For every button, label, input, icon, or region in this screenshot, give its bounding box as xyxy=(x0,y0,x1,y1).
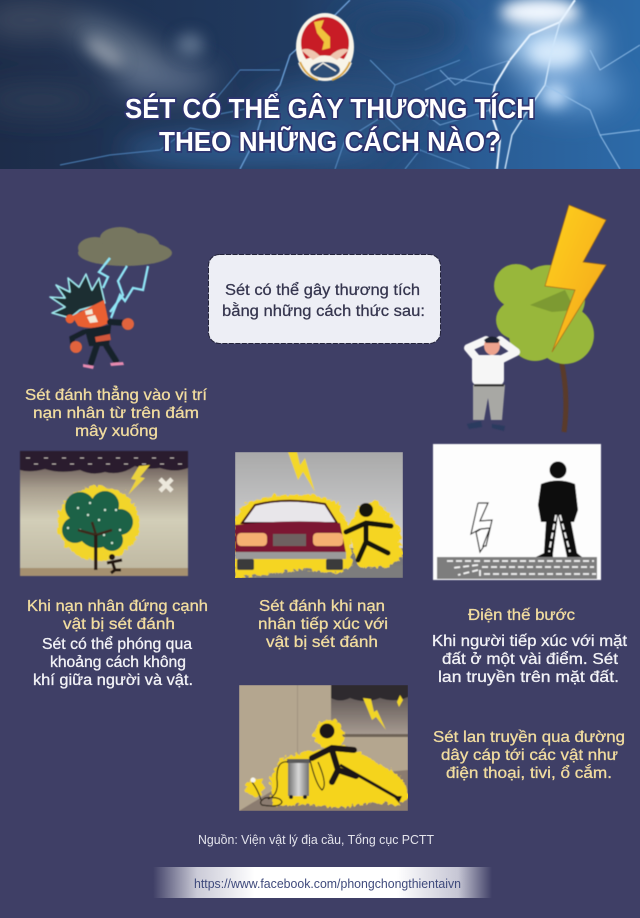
caption column: beside struck object: khoảng cách không xyxy=(50,654,186,671)
caption column: step voltage: lan truyền trên mặt đất. xyxy=(438,669,619,686)
caption: spread through cables: điện thoại, tivi, ổ cắm. xyxy=(446,765,612,782)
icon: x mark xyxy=(160,479,172,491)
callout box xyxy=(208,254,440,344)
icon: yellow glow around car and figure xyxy=(232,492,400,576)
title: SÉT CÓ THỂ GÂY THƯƠNG TÍCH xyxy=(125,93,535,124)
icon: running figure xyxy=(107,560,122,573)
icon: glowing tree xyxy=(55,484,137,558)
icon: small bolt xyxy=(128,465,150,495)
link bar: https://www.facebook.com/phongchongthientaivn xyxy=(194,876,461,891)
icon: cable and plug xyxy=(252,760,324,806)
icon: car xyxy=(242,501,337,523)
icon: bolt xyxy=(288,452,315,492)
source line: Nguồn: Viện vật lý địa cầu, Tổng cục PCTT xyxy=(198,832,434,847)
icon: tree crown xyxy=(494,264,594,364)
caption column: beside struck object: vật bị sét đánh xyxy=(63,616,175,633)
icon: electrified person xyxy=(320,724,334,738)
caption column: step voltage: đất ở một vài điểm. Sét xyxy=(442,651,619,668)
dark clouds xyxy=(20,451,188,474)
icon: standing silhouette xyxy=(536,462,582,557)
icon: storm cloud xyxy=(78,227,172,266)
icon: body xyxy=(72,322,126,363)
caption column: beside struck object: khí giữa người và vật. xyxy=(33,672,193,689)
caption column: step voltage xyxy=(432,607,628,686)
caption column: beside struck object xyxy=(27,598,208,689)
caption: spread through cables xyxy=(433,729,625,782)
logo emblem xyxy=(296,13,354,81)
caption column: contact with struck object: Sét đánh khi nạn xyxy=(259,598,385,615)
illustration: tree, lightning bolt and man xyxy=(467,205,606,432)
image panel: tree strike xyxy=(20,451,188,576)
icon: cyan lightning bolts xyxy=(99,258,148,318)
caption: spread through cables: Sét lan truyền qua đường xyxy=(433,729,625,746)
image panel: car strike xyxy=(232,452,403,578)
callout box: Sét có thể gây thương tích xyxy=(225,282,420,299)
caption: spread through cables: dây cáp tới các vật như xyxy=(441,747,618,764)
image panel: indoor cable strike xyxy=(239,685,408,811)
caption column: step voltage: Khi người tiếp xúc với mặt xyxy=(432,633,628,650)
caption: direct strike: nạn nhân từ trên đám xyxy=(33,405,199,422)
caption: direct strike: mây xuống xyxy=(75,423,158,440)
caption column: beside struck object: Sét có thể phóng qua xyxy=(42,636,192,653)
caption column: step voltage: Điện thế bước xyxy=(468,607,575,624)
caption column: contact with struck object: nhân tiếp xúc với xyxy=(258,616,388,633)
icon: figure touching car xyxy=(346,523,391,560)
icon: tree trunk xyxy=(561,360,566,432)
icon: outlined bolt xyxy=(471,503,492,552)
title xyxy=(125,93,535,157)
caption: direct strike: Sét đánh thẳng vào vị trí xyxy=(25,386,208,404)
icon: vacuum cleaner xyxy=(288,762,309,796)
icon: yellow glow xyxy=(244,717,408,806)
caption: direct strike xyxy=(25,386,208,440)
caption column: contact with struck object: vật bị sét đánh xyxy=(266,634,378,651)
image panel: step voltage xyxy=(433,444,601,580)
link bar xyxy=(153,867,492,898)
icon: worried man xyxy=(467,336,516,431)
callout box: bằng những cách thức sau: xyxy=(222,303,425,320)
arrows in ground xyxy=(444,515,596,578)
icon: head xyxy=(72,300,109,328)
icon: bolts in window xyxy=(363,698,386,730)
header: storm sky with lightning xyxy=(0,0,640,169)
caption column: beside struck object: Khi nạn nhân đứng cạnh xyxy=(27,598,208,615)
icon: spiky hair xyxy=(50,274,105,318)
caption column: contact with struck object xyxy=(258,598,388,651)
illustration: person struck from storm cloud xyxy=(50,227,172,369)
icon: large lightning bolt xyxy=(545,205,606,352)
title: THEO NHỮNG CÁCH NÀO? xyxy=(159,126,501,157)
